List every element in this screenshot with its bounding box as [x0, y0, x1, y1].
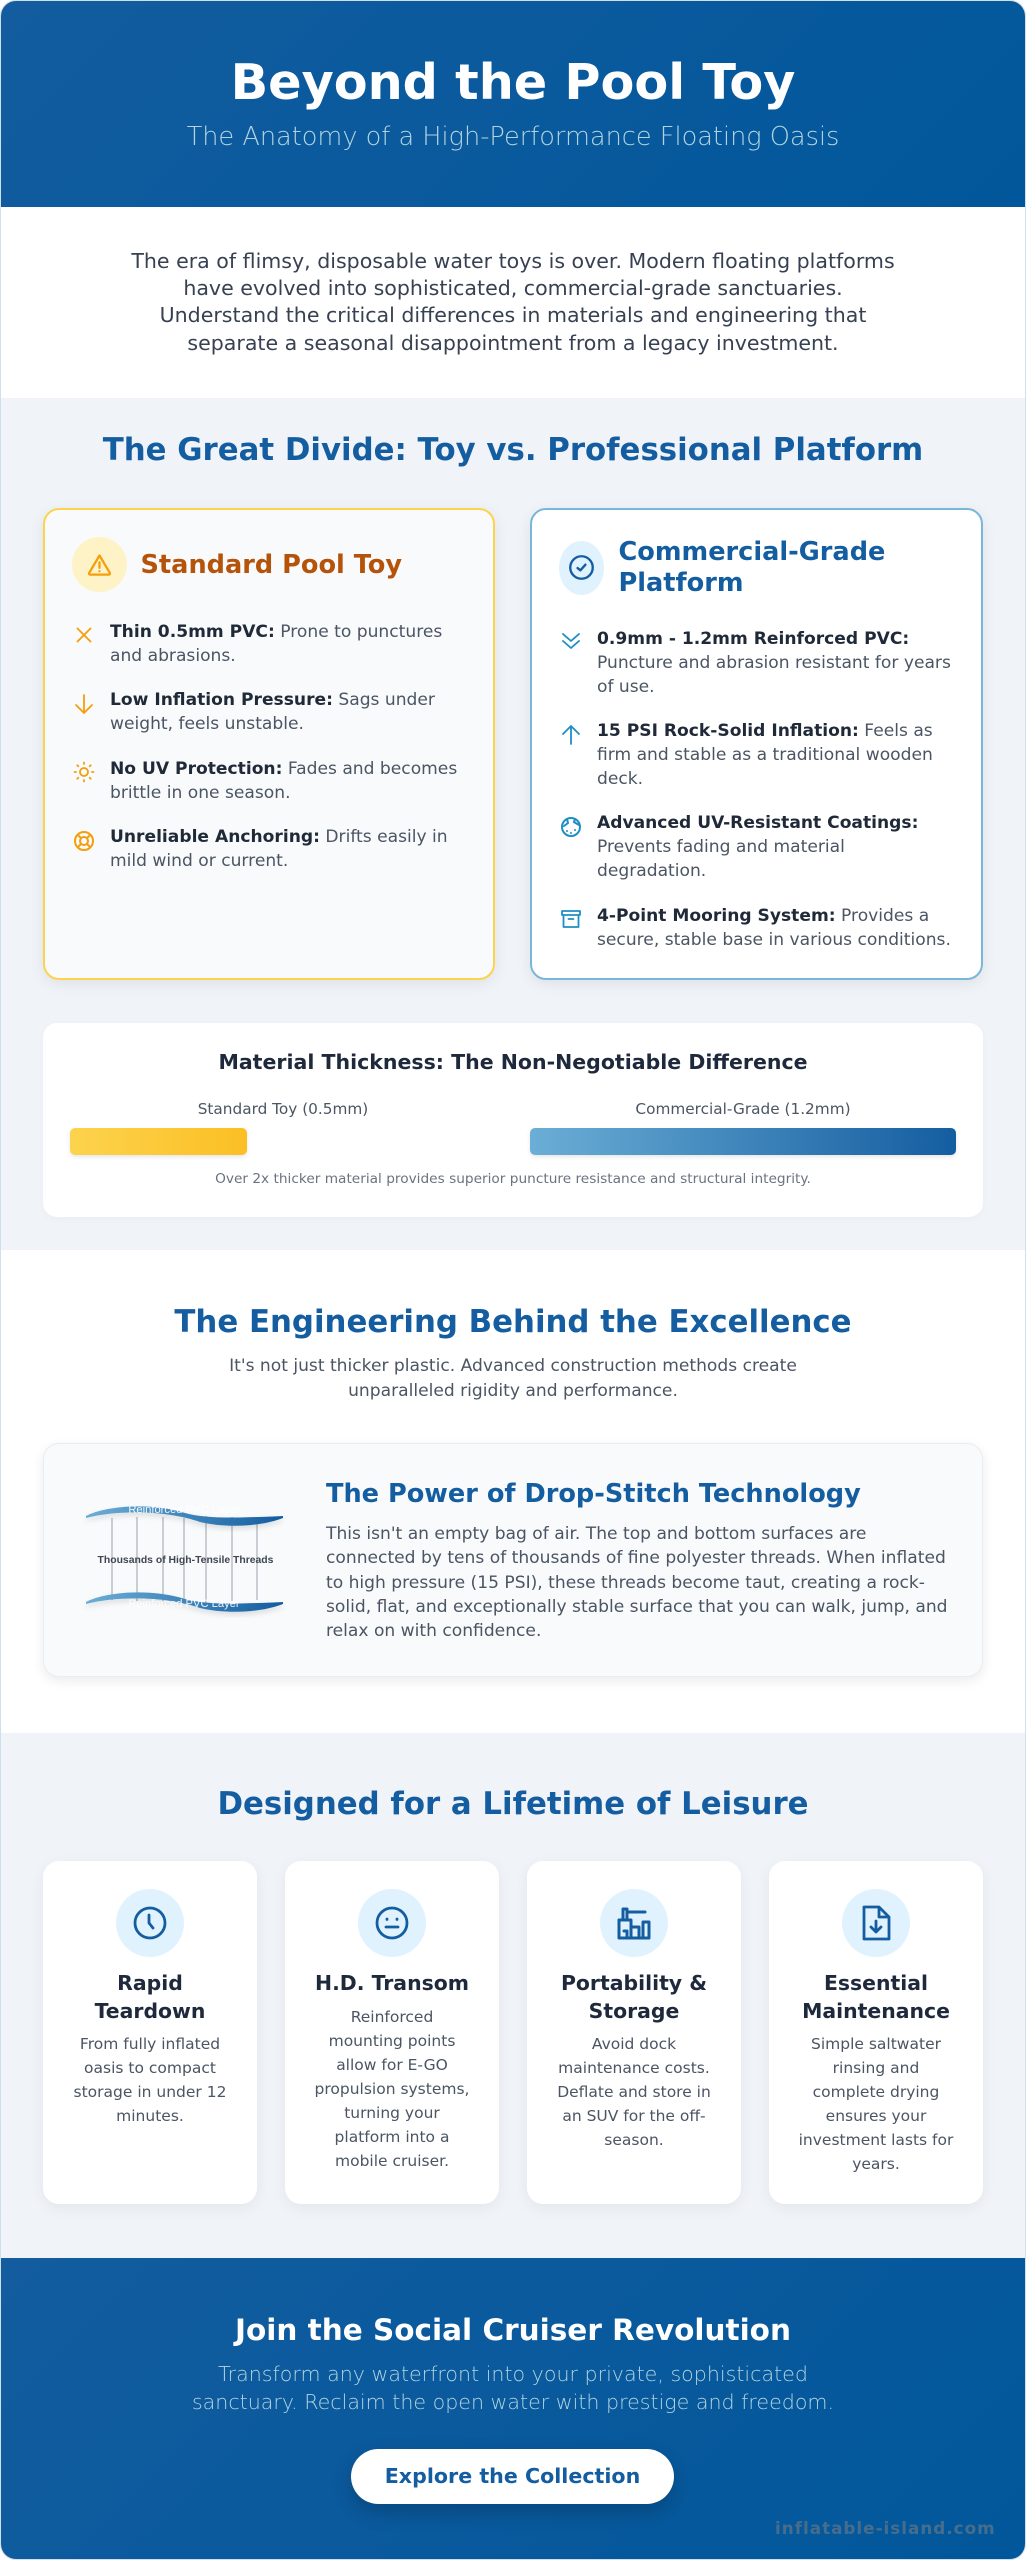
- feature text: [799, 2035, 954, 2173]
- drop-stitch description: solid, flat, and exceptionally stable surface that you can walk, jump, and: [326, 1597, 948, 1617]
- feature text: [314, 2008, 469, 2170]
- title: Beyond the Pool Toy: [231, 53, 795, 111]
- icon: double chevron: [562, 633, 580, 649]
- drop-stitch description: to high pressure (15 PSI), these threads become taut, creating a rock-: [326, 1573, 925, 1593]
- icon: face: [358, 1889, 426, 1957]
- feature text: maintenance costs.: [558, 2059, 710, 2077]
- icon: up arrow: [562, 725, 580, 745]
- feature text: complete drying: [813, 2083, 939, 2101]
- engineering subtext: It's not just thicker plastic. Advanced construction methods create: [229, 1356, 797, 1376]
- CTA text: Transform any waterfront into your private, sophisticated: [218, 2362, 808, 2386]
- drop-stitch description: This isn't an empty bag of air. The top and bottom surfaces are: [326, 1524, 866, 1544]
- list item: low pressure: [110, 690, 435, 734]
- feature text: Avoid dock: [592, 2035, 676, 2053]
- label: standard toy: Standard Toy (0.5mm): [198, 1100, 368, 1118]
- drop-stitch description: connected by tens of thousands of fine polyester threads. When inflated: [326, 1548, 946, 1568]
- feature text: From fully inflated: [80, 2035, 220, 2053]
- feature text: [557, 2035, 711, 2149]
- feature text: storage in under 12: [74, 2083, 226, 2101]
- feature card: portability: [527, 1861, 741, 2204]
- list item: low pressure: weight, feels unstable.: [110, 714, 304, 734]
- list item: 15 PSI: [597, 721, 933, 789]
- label: commercial-grade: Commercial-Grade (1.2mm): [635, 1100, 851, 1118]
- icon: archive box: [561, 910, 581, 928]
- card heading: Commercial-Grade: [618, 537, 885, 567]
- list item: 15 PSI: 15 PSI Rock-Solid Inflation: Feels as: [597, 721, 933, 741]
- list item: UV coatings: Prevents fading and material: [597, 837, 845, 857]
- feature text: Deflate and store in: [557, 2083, 711, 2101]
- feature title: [561, 1971, 707, 2022]
- icon: check circle: [559, 541, 604, 595]
- list item: no UV: [110, 759, 457, 803]
- panel: drop-stitch: [43, 1443, 983, 1677]
- feature card: maintenance: [769, 1861, 983, 2204]
- list item: reinforced PVC: Puncture and abrasion resistant for years: [597, 653, 951, 673]
- icon: cross: [76, 628, 92, 642]
- panel: material thickness: [43, 1023, 983, 1217]
- list item: reinforced PVC: 0.9mm - 1.2mm Reinforced PVC:: [597, 629, 909, 649]
- feature text: mounting points: [329, 2032, 455, 2050]
- list item: reinforced PVC: [597, 629, 951, 697]
- diagram: drop-stitch cross-section: Thousands of High-Tensile Threads: [98, 1555, 274, 1566]
- feature title: Essential: [824, 1971, 928, 1995]
- CTA text: [192, 2362, 834, 2414]
- feature text: investment lasts for: [799, 2131, 953, 2149]
- feature title: Rapid: [117, 1971, 183, 1995]
- feature text: rinsing and: [833, 2059, 919, 2077]
- feature card: rapid teardown: [43, 1861, 257, 2204]
- diagram: drop-stitch cross-section: [86, 1504, 283, 1616]
- engineering subtext: [229, 1356, 797, 1400]
- feature title: [94, 1971, 205, 2022]
- feature text: oasis to compact: [84, 2059, 216, 2077]
- features heading: Designed for a Lifetime of Leisure: [217, 1786, 809, 1822]
- feature text: season.: [604, 2131, 664, 2149]
- icon: globe: [561, 817, 581, 837]
- feature text: minutes.: [116, 2107, 184, 2125]
- intro text block: Understand the critical differences in materials and engineering that: [160, 303, 866, 327]
- list item: UV coatings: degradation.: [597, 861, 706, 881]
- feature title: [802, 1971, 950, 2022]
- panel: standard pool toy: [43, 508, 495, 980]
- feature text: years.: [852, 2155, 900, 2173]
- list item: no UV: brittle in one season.: [110, 783, 291, 803]
- CTA button: [351, 2449, 674, 2504]
- intro text block: have evolved into sophisticated, commercial-grade sanctuaries.: [183, 276, 843, 300]
- bar: standard toy: [70, 1128, 247, 1155]
- engineering subtext: unparalleled rigidity and performance.: [348, 1380, 678, 1400]
- feature text: turning your: [344, 2104, 440, 2122]
- comparison heading: The Great Divide: Toy vs. Professional Platform: [103, 432, 923, 468]
- list item: thin PVC: Thin 0.5mm PVC: Prone to punctures: [110, 622, 442, 642]
- bar: commercial-grade: [530, 1128, 956, 1155]
- drop-stitch heading: The Power of Drop-Stitch Technology: [326, 1479, 861, 1509]
- diagram: drop-stitch cross-section: Reinforced PVC Layer: [128, 1504, 240, 1516]
- feature text: propulsion systems,: [314, 2080, 469, 2098]
- icon: lifebuoy: [74, 831, 94, 851]
- CTA button: Explore the Collection: [385, 2464, 640, 2488]
- icon: clock: [116, 1889, 184, 1957]
- panel: call to action: [1, 2258, 1025, 2559]
- panel: features section: [1, 1733, 1025, 2258]
- engineering heading: The Engineering Behind the Excellence: [174, 1304, 852, 1340]
- list item: UV coatings: [597, 813, 918, 881]
- watermark: inflatable-island.com: [775, 2518, 996, 2538]
- list item: low pressure: Low Inflation Pressure: Sags under: [110, 690, 435, 710]
- thickness title: Material Thickness: The Non-Negotiable Difference: [218, 1050, 808, 1074]
- subtitle: The Anatomy of a High-Performance Floating Oasis: [187, 122, 839, 152]
- list item: mooring: [597, 906, 951, 950]
- diagram: drop-stitch cross-section: Reinforced PVC Layer: [128, 1598, 240, 1610]
- feature text: allow for E-GO: [336, 2056, 448, 2074]
- list item: mooring: 4-Point Mooring System: Provides a: [597, 906, 929, 926]
- list item: anchoring: [110, 827, 448, 871]
- panel: header: [1, 1, 1025, 207]
- list item: UV coatings: Advanced UV-Resistant Coatings:: [597, 813, 918, 833]
- intro text block: [131, 249, 895, 355]
- list item: reinforced PVC: of use.: [597, 677, 655, 697]
- icon: down arrow: [75, 694, 93, 714]
- card heading: Platform: [618, 568, 744, 598]
- feature text: Reinforced: [351, 2008, 433, 2026]
- drop-stitch description: [326, 1524, 948, 1641]
- feature text: an SUV for the off-: [562, 2107, 706, 2125]
- list item: anchoring: mild wind or current.: [110, 851, 288, 871]
- list item: thin PVC: and abrasions.: [110, 646, 236, 666]
- list item: 15 PSI: deck.: [597, 769, 643, 789]
- feature text: ensures your: [826, 2107, 926, 2125]
- feature text: [74, 2035, 226, 2125]
- feature text: mobile cruiser.: [335, 2152, 449, 2170]
- icon: file download: [842, 1889, 910, 1957]
- feature text: platform into a: [335, 2128, 449, 2146]
- panel: comparison section: [1, 398, 1025, 1250]
- icon: building: [600, 1889, 668, 1957]
- CTA text: sanctuary. Reclaim the open water with prestige and freedom.: [192, 2390, 834, 2414]
- feature title: Portability &: [561, 1971, 707, 1995]
- feature title: Teardown: [95, 1998, 205, 2022]
- thickness caption: Over 2x thicker material provides superior puncture resistance and structural integrity.: [215, 1171, 811, 1187]
- list item: 15 PSI: firm and stable as a traditional wooden: [597, 745, 933, 765]
- icon: sun: [74, 762, 94, 782]
- list item: mooring: secure, stable base in various conditions.: [597, 930, 951, 950]
- card heading: [618, 537, 885, 598]
- list item: no UV: No UV Protection: Fades and becomes: [110, 759, 457, 779]
- list item: anchoring: Unreliable Anchoring: Drifts easily in: [110, 827, 448, 847]
- icon: warning: [72, 537, 127, 592]
- feature title: Maintenance: [802, 1998, 950, 2022]
- feature title: H.D. Transom: [315, 1971, 469, 1995]
- CTA heading: Join the Social Cruiser Revolution: [235, 2313, 791, 2347]
- feature text: Simple saltwater: [811, 2035, 941, 2053]
- list item: thin PVC: [110, 622, 442, 666]
- panel: commercial-grade platform: [530, 508, 983, 980]
- intro text block: separate a seasonal disappointment from a legacy investment.: [187, 331, 839, 355]
- intro text block: The era of flimsy, disposable water toys is over. Modern floating platforms: [131, 249, 895, 273]
- drop-stitch description: relax on with confidence.: [326, 1621, 541, 1641]
- feature card: transom: [285, 1861, 499, 2204]
- card heading: Standard Pool Toy: [140, 550, 402, 580]
- feature title: Storage: [589, 1998, 679, 2022]
